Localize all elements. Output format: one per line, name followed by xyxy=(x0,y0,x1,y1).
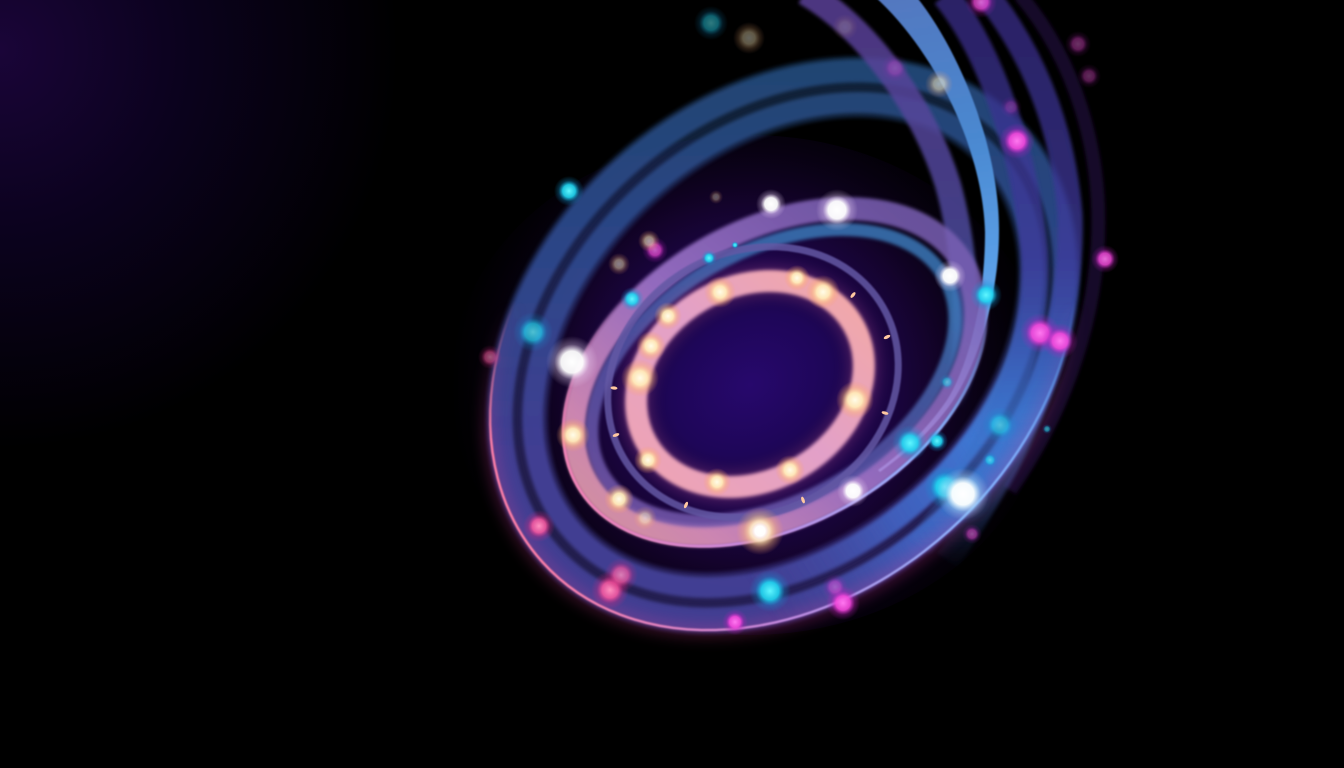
middle ring main band xyxy=(517,141,1033,603)
interior purple glow xyxy=(450,135,1050,635)
small dashes xyxy=(610,291,891,509)
outer ring band two xyxy=(436,4,1130,686)
third arm xyxy=(920,0,1035,546)
inner ring xyxy=(598,240,902,528)
middle ring xyxy=(517,141,1033,603)
middle ring bright edge xyxy=(561,312,988,549)
upper spiral arms xyxy=(805,0,1098,560)
bright blue arm xyxy=(873,0,999,472)
outer ring bright edge xyxy=(476,307,1073,644)
thin ring around inner ring xyxy=(558,194,948,570)
central hole xyxy=(611,254,889,516)
lower right blue sweep xyxy=(800,334,1065,597)
outer ring xyxy=(391,0,1175,731)
second arm xyxy=(805,0,966,405)
glowing dots xyxy=(478,0,1119,635)
outer ring band one xyxy=(391,0,1175,731)
corner glow xyxy=(0,0,430,460)
faint outer trail xyxy=(1010,0,1098,490)
middle ring blue band xyxy=(541,169,1006,581)
outer ring haze xyxy=(414,0,1152,709)
outer trail xyxy=(947,0,1070,560)
